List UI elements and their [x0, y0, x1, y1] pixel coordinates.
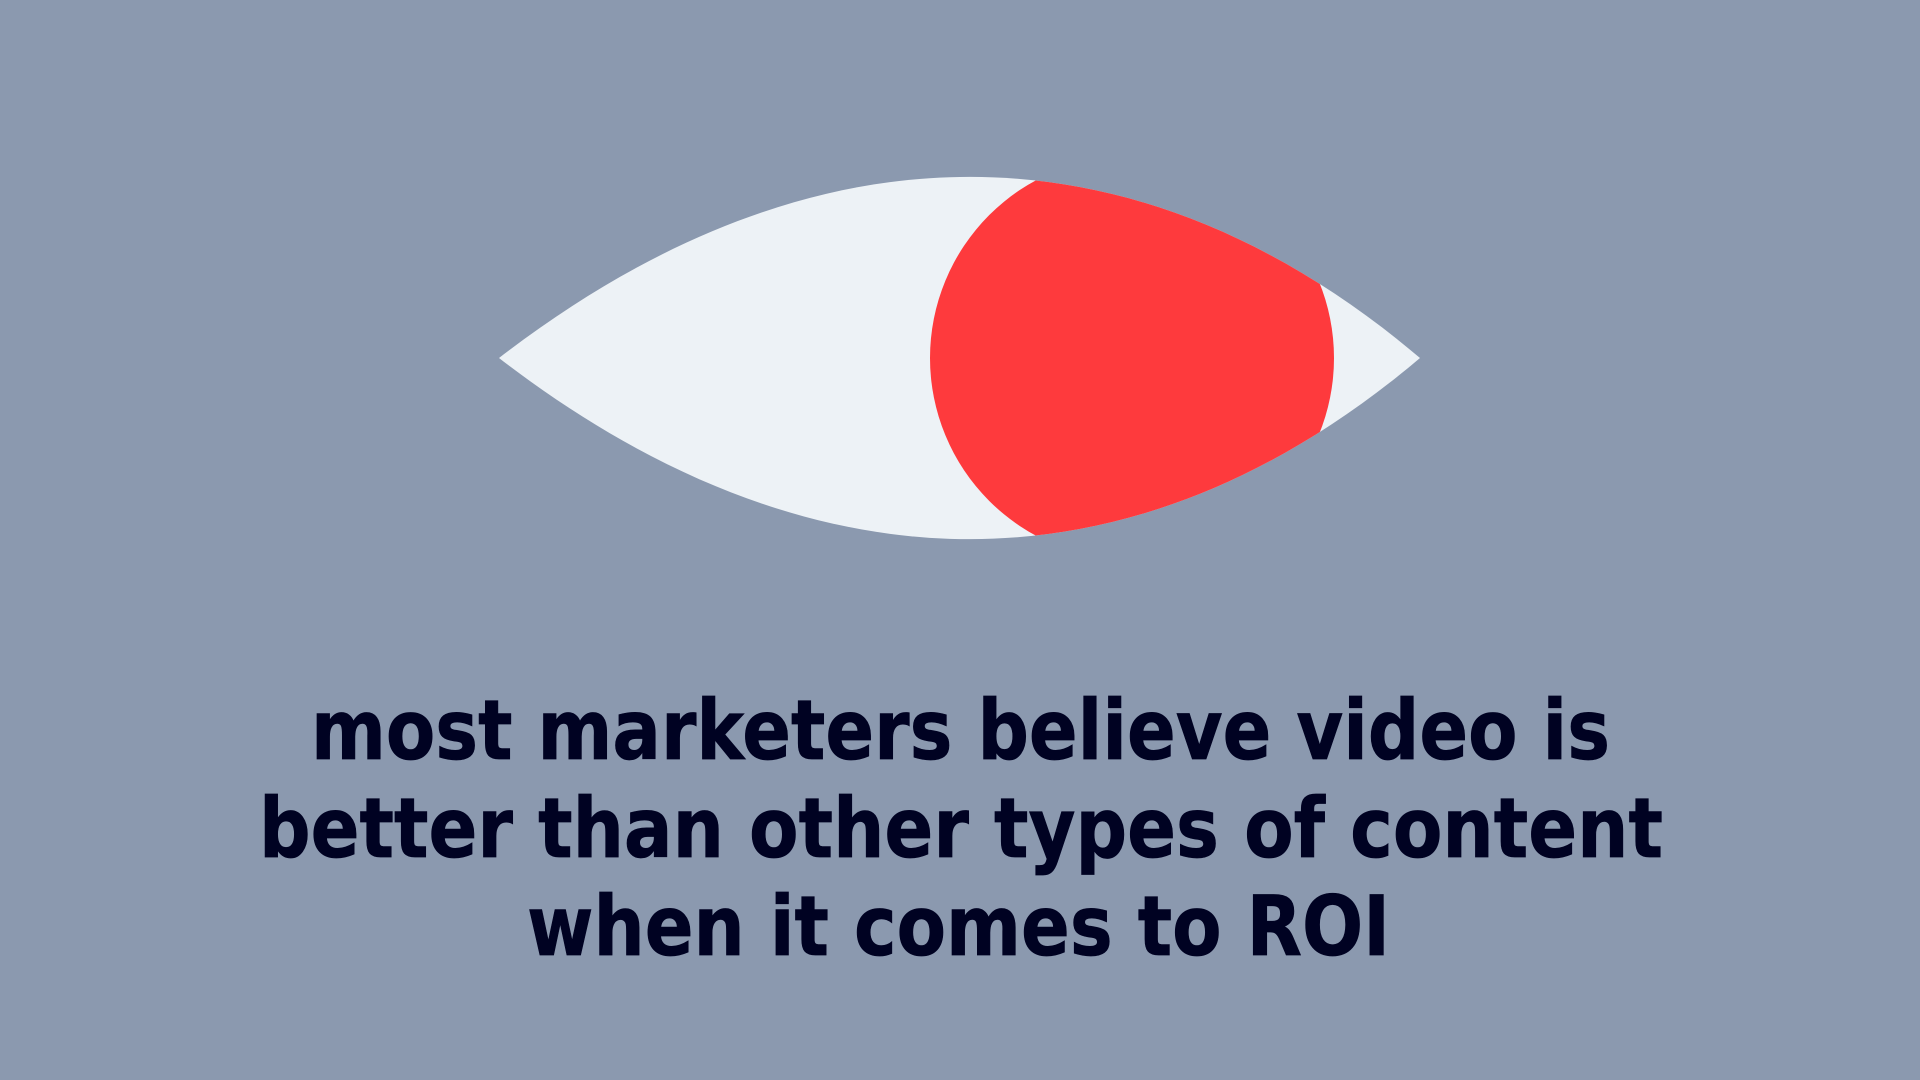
caption line 1: most marketers believe video is [311, 682, 1610, 779]
red iris [930, 180, 1334, 536]
caption line 3: when it comes to ROI [527, 878, 1390, 975]
caption line 2: better than other types of content [259, 780, 1663, 877]
icon: eye with red iris [499, 176, 1420, 540]
eye white [499, 177, 1420, 539]
infographic canvas [264, 176, 1662, 956]
caption: video ROI statement [259, 682, 1663, 975]
